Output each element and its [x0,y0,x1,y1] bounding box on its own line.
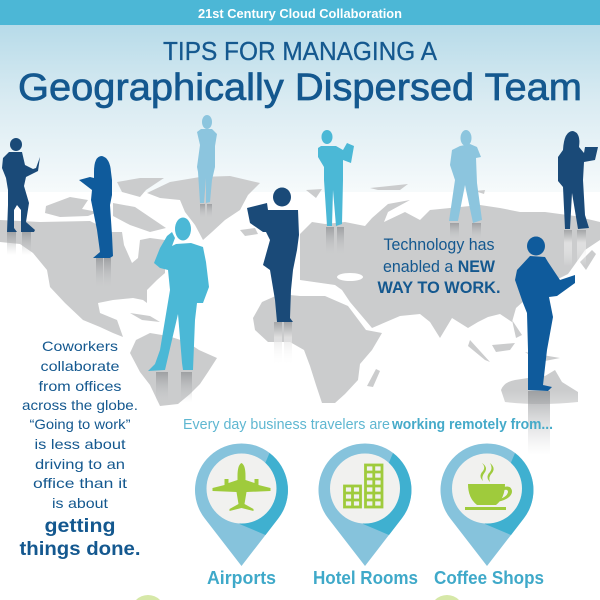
title [18,36,582,109]
figure: woman light blue [197,115,217,203]
pin labels: Airports [207,567,276,588]
figure: man on phone, light blue [449,130,482,223]
text: coworkers paragraph: “Going to work” [30,416,131,432]
eurasia [300,200,600,338]
world map [0,176,600,406]
icon: coffee cup [465,463,512,510]
text: every day travelers: Every day business travelers are [183,417,390,433]
madagascar [367,369,380,387]
text: coworkers paragraph: is less about [34,436,126,452]
text: coworkers paragraph: is about [52,495,108,511]
header bar [0,0,600,25]
japan [580,250,596,270]
text: technology callout: enabled a NEW [383,258,495,276]
figure: woman with laptop, dark [558,131,598,229]
figure: man with tablet, blue [515,236,575,391]
figure: man with tablet, cyan [318,130,354,226]
pin: airports [195,443,288,566]
text: technology callout [378,236,500,297]
pin labels: Hotel Rooms [313,567,418,588]
north stubs [306,184,485,198]
reflections under figures [7,204,586,455]
text: technology callout: WAY TO WORK. [378,279,500,297]
figure: woman with folder, dark [247,188,299,322]
text: coworkers paragraph: driving to an [35,456,125,472]
black sea [337,273,363,281]
pin labels [207,567,544,588]
title: TIPS FOR MANAGING A [163,36,438,66]
pin labels: Coffee Shops [434,567,544,588]
figure: man with laptop [2,138,40,232]
text: coworkers paragraph: collaborate [40,358,120,374]
figure: woman with tablet, blue [79,156,113,258]
pin: coffee shops [440,443,534,566]
text: coworkers paragraph [20,338,140,560]
text: coworkers paragraph: office than it [33,475,127,491]
text: coworkers paragraph: from offices [38,378,122,394]
north america [0,220,172,337]
africa [253,294,382,403]
icon: buildings [344,465,382,507]
figure: man on phone, cyan [148,218,209,371]
text: coworkers paragraph: across the globe. [22,397,138,413]
south america [130,333,217,406]
caribbean islands [130,313,160,322]
pin: hotel rooms [318,443,412,566]
text: every day travelers [183,417,553,433]
text: every day travelers: working remotely from... [391,417,553,433]
australia [501,370,578,404]
canadian islands [45,197,98,217]
title: Geographically Dispersed Team [18,67,582,109]
text: coworkers paragraph: getting [44,516,116,537]
greenland [147,176,260,240]
text: technology callout: Technology has [384,236,494,254]
se asia islands [468,320,560,362]
header bar: 21st Century Cloud Collaboration [198,7,402,21]
next section circles [131,595,464,600]
background sky [0,25,600,192]
text: coworkers paragraph: things done. [20,539,140,560]
text: coworkers paragraph: Coworkers [42,338,118,354]
icon: airplane [212,463,270,511]
